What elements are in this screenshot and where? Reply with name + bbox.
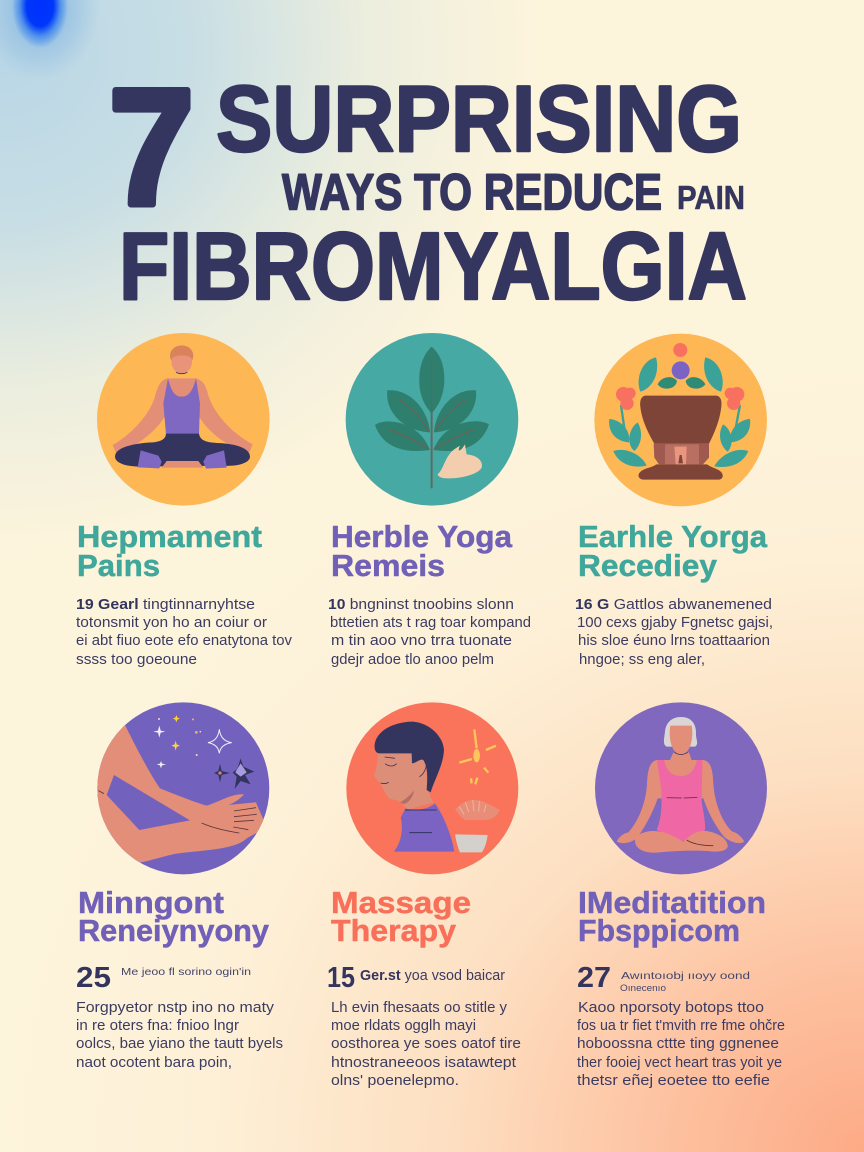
heading: Recediey	[578, 548, 718, 583]
body text	[577, 999, 785, 1089]
body text: in re oters fna: fnioo lngr	[76, 1017, 239, 1034]
heading: IMeditatition	[578, 885, 766, 920]
body text: Kaoo nporsoty botops ttoo	[578, 999, 764, 1016]
heading: Remeis	[331, 548, 445, 583]
heading: Earhle Yorga	[578, 519, 768, 554]
numeral 7: 7	[109, 55, 194, 239]
body text: totonsmit yon ho an coiur or	[76, 614, 267, 631]
heading: Minngont	[78, 885, 224, 920]
body text: htnostraneeoos isatawtept	[331, 1054, 517, 1071]
panel: hepmament pains	[76, 333, 292, 668]
heading	[578, 885, 766, 948]
heading: Reneiynyony	[78, 913, 270, 948]
body text: ther fooiej vect heart tras yoit ye	[577, 1054, 782, 1071]
icon: massaging arms with sparkles	[90, 702, 269, 874]
body text	[331, 999, 521, 1089]
body text: gdejr adoe tlo anoo pelm	[331, 651, 494, 668]
stat: 25: 25	[76, 962, 111, 994]
heading: Massage	[331, 885, 471, 920]
panel: herble yoga remeis	[328, 333, 531, 668]
heading: Hepmament	[77, 519, 262, 554]
icon: mortar with flowers	[594, 334, 767, 506]
icon: herbal plant	[346, 333, 518, 506]
icon: seated meditating woman	[595, 702, 767, 874]
stat: 15: Ger.st yoa vsod baicar	[360, 967, 505, 984]
heading	[331, 885, 471, 948]
body text: oolcs, bae yiano the tautt byels	[76, 1035, 283, 1052]
stat: 27: Oınecenıo	[620, 983, 666, 993]
heading: Herble Yoga	[331, 519, 513, 554]
stat: 15	[327, 962, 505, 994]
title line: ways to reduce: WAYS TO REDUCE	[282, 164, 662, 220]
title line: surprising: SURPRISING	[216, 66, 742, 171]
icon: seated yoga figure	[97, 333, 270, 506]
heading: Pains	[77, 548, 160, 583]
stat: 25	[76, 962, 251, 994]
body text	[328, 596, 531, 668]
stat: 27	[577, 962, 750, 994]
heading: Fbsppicom	[578, 913, 740, 948]
icon: person receiving massage	[346, 702, 518, 874]
infographic canvas	[76, 84, 784, 1088]
stat: 25: Me jeoo fl sorino ogin'in	[121, 966, 251, 978]
stat: 15: 15	[327, 962, 355, 994]
body text: bttetien ats t rag toar kompand	[330, 614, 531, 631]
body text: thetsr eñej eoetee tto eefie	[577, 1072, 770, 1089]
panel: minngont reneiynyony	[76, 702, 283, 1071]
title word: pain: PAIN	[677, 179, 745, 216]
panel: massage therapy	[327, 702, 521, 1089]
heading	[331, 519, 513, 583]
body text: oosthorea ye soes oatof tire	[331, 1035, 521, 1052]
body text: Lh evin fhesaats oo stitle y	[331, 999, 507, 1016]
body text: 10 bngninst tnoobins slonn	[328, 596, 514, 613]
body text: olns' poenelepmo.	[331, 1072, 459, 1089]
stat: 27: 27	[577, 962, 611, 994]
panel: meditation	[577, 702, 785, 1089]
body text	[76, 596, 292, 668]
body text: fos ua tr fiet t'mvith rre fme ohčre	[577, 1017, 785, 1034]
body text: hoboossna cttte ting ggnenee	[577, 1035, 779, 1052]
stat: 27: Awıntoıobj ııoyy oond	[621, 970, 750, 982]
body text: ssss too goeoune	[76, 651, 197, 668]
body text: Forgpyetor nstp ino no maty	[76, 999, 275, 1016]
body text: his sloe éuno lrns toattaarion	[578, 632, 770, 649]
title line: fibromyalgia: FIBROMYALGIA	[119, 213, 747, 320]
heading	[78, 885, 270, 948]
panel: earhle yorga recediey	[575, 334, 773, 668]
heading	[77, 519, 262, 583]
body text: 100 cexs gjaby Fgnetsc gajsi,	[577, 614, 773, 631]
heading	[578, 519, 768, 583]
body text: 16 G Gattlos abwanemened	[575, 596, 772, 613]
body text: ei abt fiuo eote efo enatytona tov	[76, 632, 292, 649]
body text: m tin aoo vno trra tuonate	[331, 632, 512, 649]
body text	[76, 999, 283, 1071]
title	[109, 55, 747, 320]
body text: naot ocotent bara poin,	[76, 1054, 232, 1071]
body text: moe rldats ogglh mayi	[331, 1017, 476, 1034]
body text	[575, 596, 773, 668]
heading: Therapy	[331, 913, 457, 948]
body text: 19 Gearl tingtinnarnyhtse	[76, 596, 255, 613]
body text: hngoe; ss eng aler,	[579, 651, 705, 668]
